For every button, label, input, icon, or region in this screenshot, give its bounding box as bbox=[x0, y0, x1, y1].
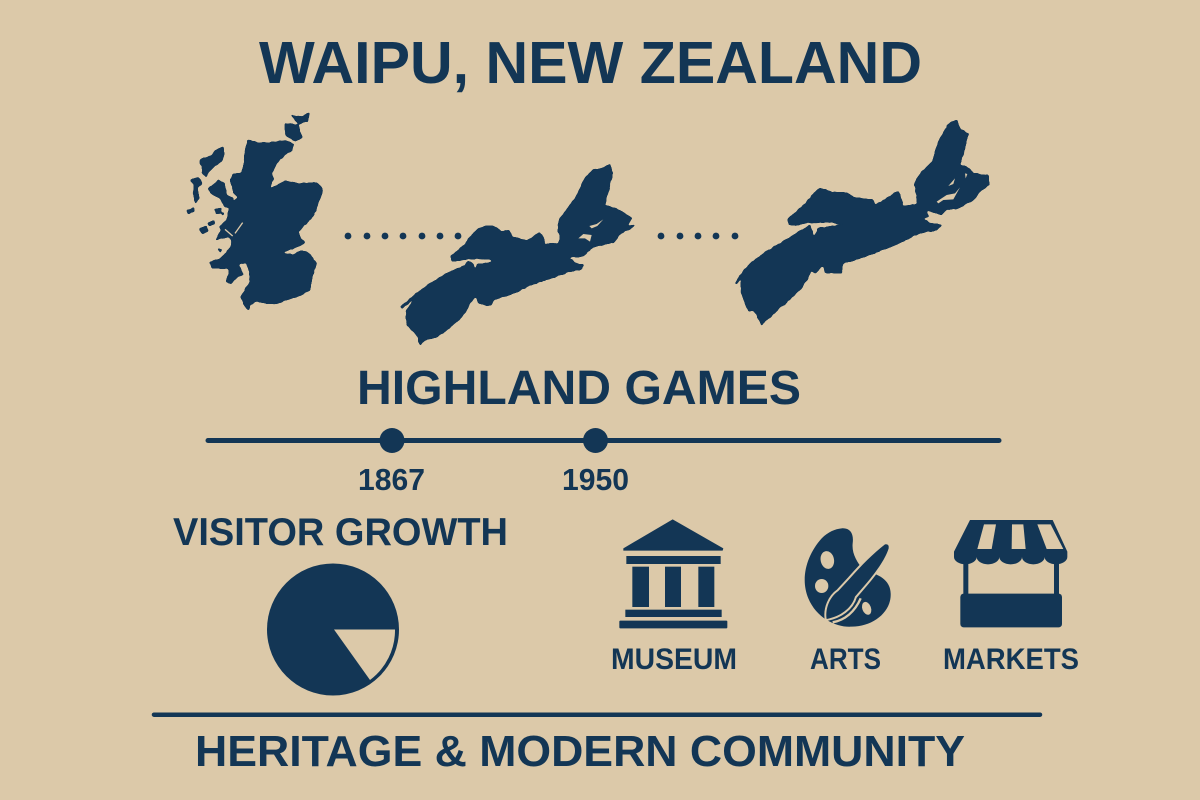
footer rule bbox=[154, 712, 1040, 717]
heading: Visitor Growth: VISITOR GROWTH bbox=[173, 511, 508, 554]
map: Nova Scotia, right bbox=[735, 120, 990, 325]
label: Markets: MARKETS bbox=[943, 643, 1079, 676]
dotted connector 2 bbox=[658, 233, 738, 239]
icon: museum bbox=[619, 519, 727, 628]
heading: Highland Games: HIGHLAND GAMES bbox=[357, 362, 801, 415]
icon: palette and brush bbox=[805, 528, 891, 627]
year 1867: 1867 bbox=[358, 462, 425, 497]
year 1950: 1950 bbox=[562, 462, 629, 497]
timeline bbox=[208, 428, 999, 497]
dotted connector 1 bbox=[345, 233, 461, 239]
footer heading: HERITAGE & MODERN COMMUNITY bbox=[195, 727, 965, 776]
map: Scotland bbox=[187, 113, 323, 310]
title: WAIPU, NEW ZEALAND bbox=[259, 29, 922, 96]
map: Nova Scotia, centre bbox=[400, 164, 635, 345]
marker 1950 bbox=[583, 428, 608, 453]
pie chart bbox=[267, 564, 399, 696]
label: Museum: MUSEUM bbox=[611, 643, 737, 676]
marker 1867 bbox=[380, 428, 404, 453]
label: Arts: ARTS bbox=[810, 643, 881, 676]
icon: market stall bbox=[954, 520, 1067, 627]
